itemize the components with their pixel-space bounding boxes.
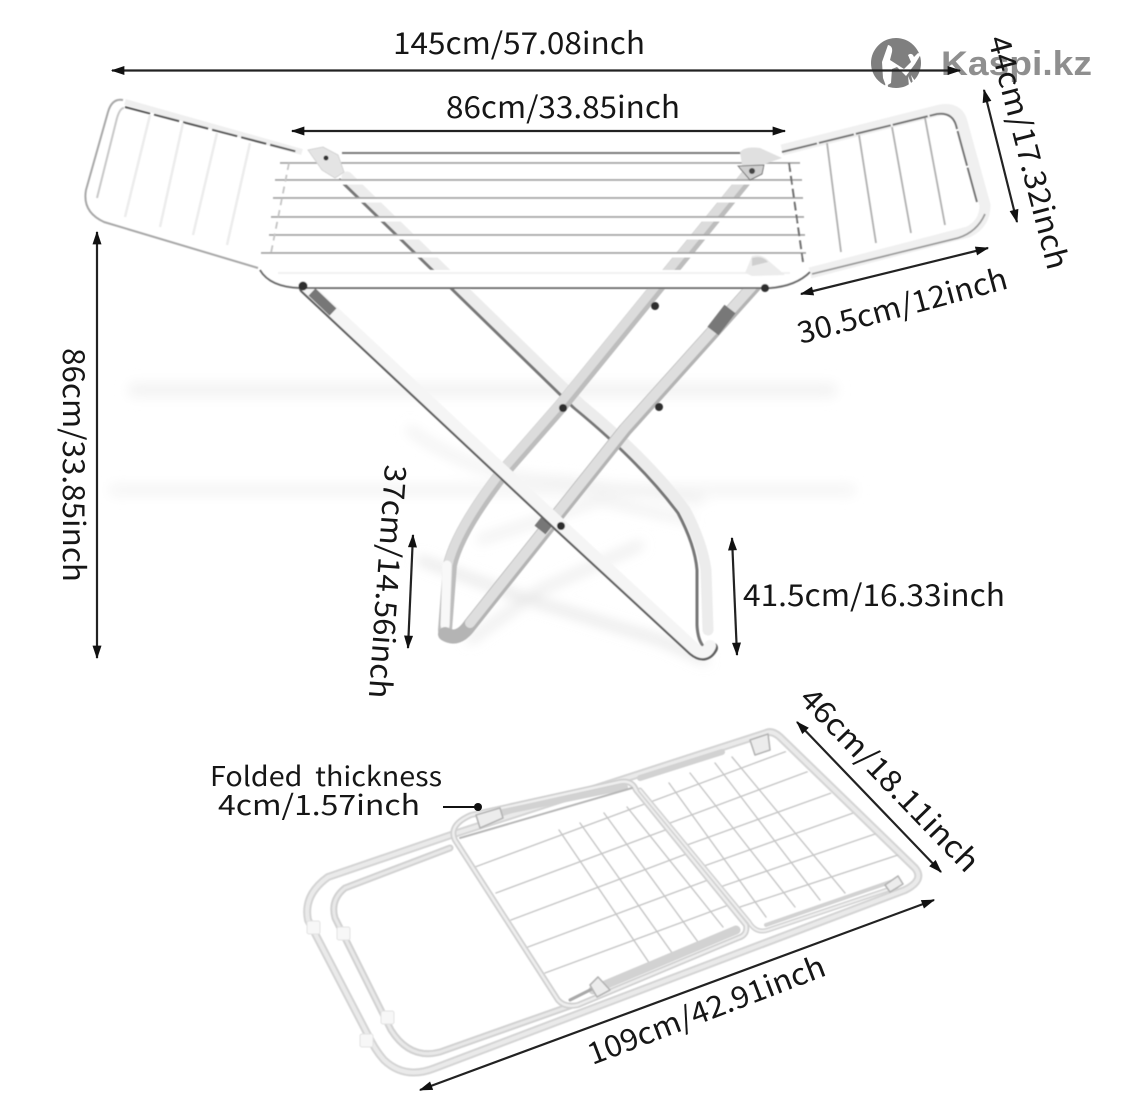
dimension: left foot height: 37cm/14.56inch <box>360 464 420 700</box>
outer folded frame <box>307 732 918 1072</box>
folded panel two <box>640 790 896 931</box>
logo badge <box>871 38 921 88</box>
dimension: folded width: 46cm/18.11inch <box>791 676 991 880</box>
open drying rack <box>85 100 985 655</box>
folded hinges <box>476 734 903 997</box>
callout: folded thickness: 4cm/1.57inch <box>218 784 420 824</box>
folded rack <box>307 732 918 1072</box>
dimension: wing width: 30.5cm/12inch <box>792 254 1012 353</box>
left wing <box>85 100 302 268</box>
dimension: right foot height <box>732 538 1005 655</box>
leg pivots <box>557 302 663 530</box>
frame joints <box>307 921 394 1047</box>
hinge brackets <box>308 147 785 276</box>
back leg running to lower left <box>445 176 747 630</box>
legs <box>305 176 755 655</box>
folded panel one <box>453 782 746 1006</box>
logo wordmark: Kaspi.kz <box>941 45 1092 83</box>
dimension: centre width: 86cm/33.85inch <box>446 83 680 127</box>
hanging rods <box>261 153 806 262</box>
right wing <box>782 110 985 274</box>
dimension: overall width: 145cm/57.08inch <box>393 19 645 63</box>
folded rods <box>460 752 896 1000</box>
floor shadows <box>115 390 850 660</box>
front leg running to lower left <box>445 283 755 637</box>
callout: folded thickness: Folded thickness <box>210 755 442 794</box>
dimension: folded length: 109cm/42.91inch <box>580 942 831 1074</box>
dimension: right foot height: 41.5cm/16.33inch <box>743 571 1005 615</box>
back leg running to lower right <box>340 177 708 650</box>
dimension: wing depth: 44cm/17.32inch <box>979 30 1082 273</box>
grid wires <box>475 750 898 973</box>
front leg running to lower right <box>305 286 712 655</box>
watermark: Kaspi.kz logo <box>871 38 1092 88</box>
dimension: overall height: 86cm/33.85inch <box>54 348 98 582</box>
dimension: folded length <box>420 900 934 1090</box>
inner folded frame <box>334 848 570 1054</box>
callout: folded thickness <box>210 755 482 824</box>
front bar <box>260 270 810 292</box>
